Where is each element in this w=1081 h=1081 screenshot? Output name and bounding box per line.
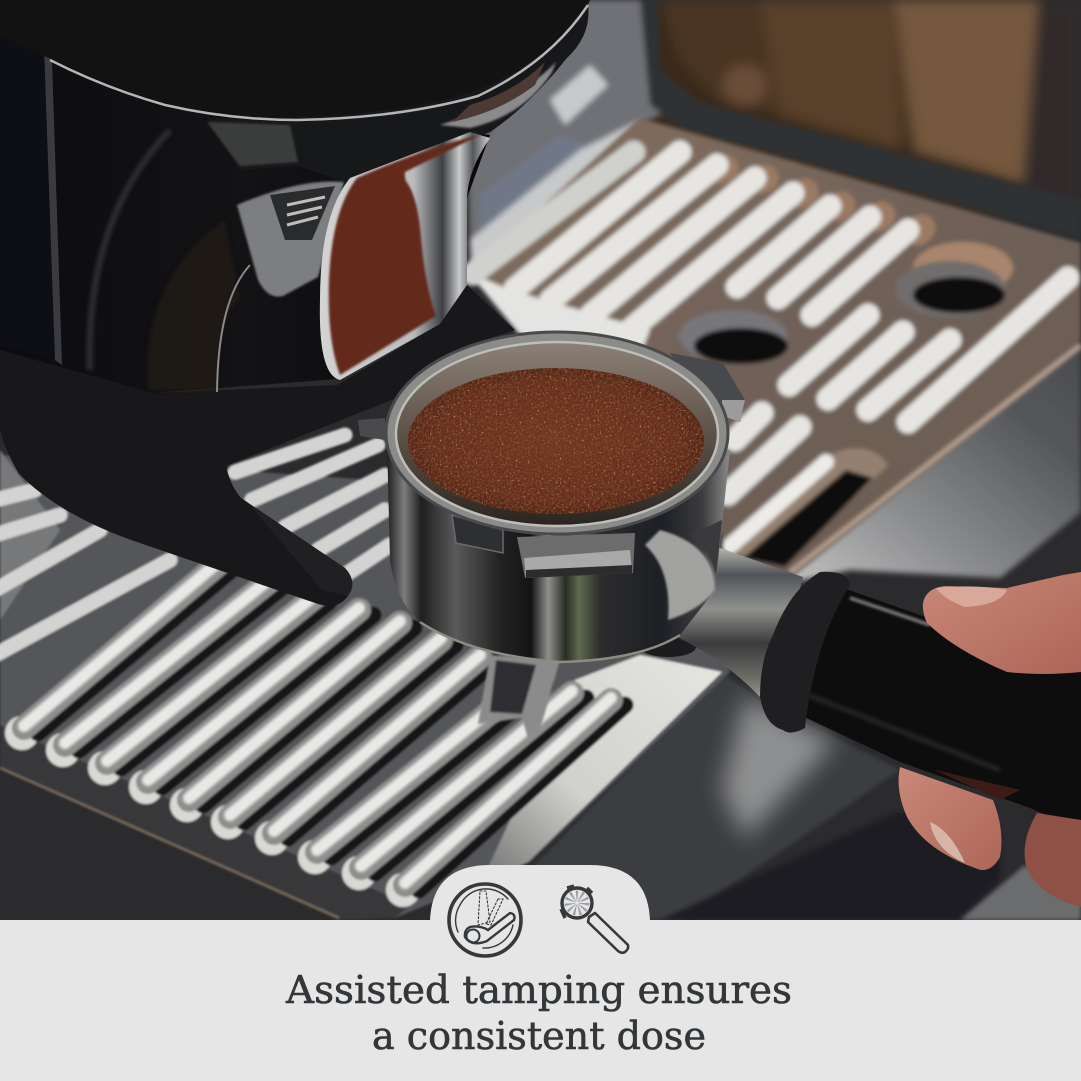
caption heading: Assisted tamping ensures	[285, 968, 792, 1012]
thumb	[923, 572, 1081, 674]
chrome spout part	[237, 181, 344, 297]
lower finger	[899, 767, 1001, 870]
spout lugs	[517, 533, 635, 578]
portafilter basket body	[387, 440, 730, 662]
portafilter handle	[760, 572, 1081, 820]
portafilter	[358, 332, 803, 738]
slat slots	[38, 561, 625, 890]
ear of portafilter	[670, 353, 745, 422]
chrome drip tray with slats	[0, 435, 730, 920]
third finger	[1025, 813, 1081, 907]
front chrome band	[0, 725, 410, 920]
grinder	[0, 0, 590, 606]
bottom caption panel	[0, 865, 1081, 1081]
icon: portafilter	[561, 886, 628, 953]
machine frame around tray	[468, 0, 1081, 285]
steel rim	[386, 332, 728, 534]
icon: assisted tamping	[449, 884, 521, 956]
foot shadow behind portafilter	[640, 637, 696, 657]
upper slats	[472, 152, 1068, 494]
grinder black hood	[0, 0, 590, 119]
grinder glossy body	[0, 30, 490, 393]
drain holes	[913, 242, 1013, 294]
caption heading	[285, 968, 792, 1058]
light chrome plane	[480, 655, 722, 885]
slats at far left and behind grinder arm	[0, 450, 60, 620]
long slot	[728, 448, 888, 565]
slat highlights	[24, 554, 611, 883]
slat bodies	[24, 556, 611, 885]
drip tray copper plate	[468, 118, 1081, 575]
coffee in chute	[329, 134, 482, 375]
hand	[899, 572, 1081, 907]
right steel panel	[780, 345, 1081, 585]
ground coffee	[408, 368, 704, 514]
window and wooden surroundings	[640, 0, 1081, 215]
portafilter handle neck	[673, 547, 803, 702]
chrome collar	[207, 4, 589, 182]
portafilter spouts	[478, 655, 560, 738]
caption heading: a consistent dose	[372, 1014, 706, 1058]
copper slat rims	[720, 168, 922, 232]
slat tip halos	[5, 716, 420, 907]
rubber collar	[760, 572, 850, 733]
grinder lower cradle	[0, 285, 515, 606]
chrome chute surround	[320, 132, 490, 380]
